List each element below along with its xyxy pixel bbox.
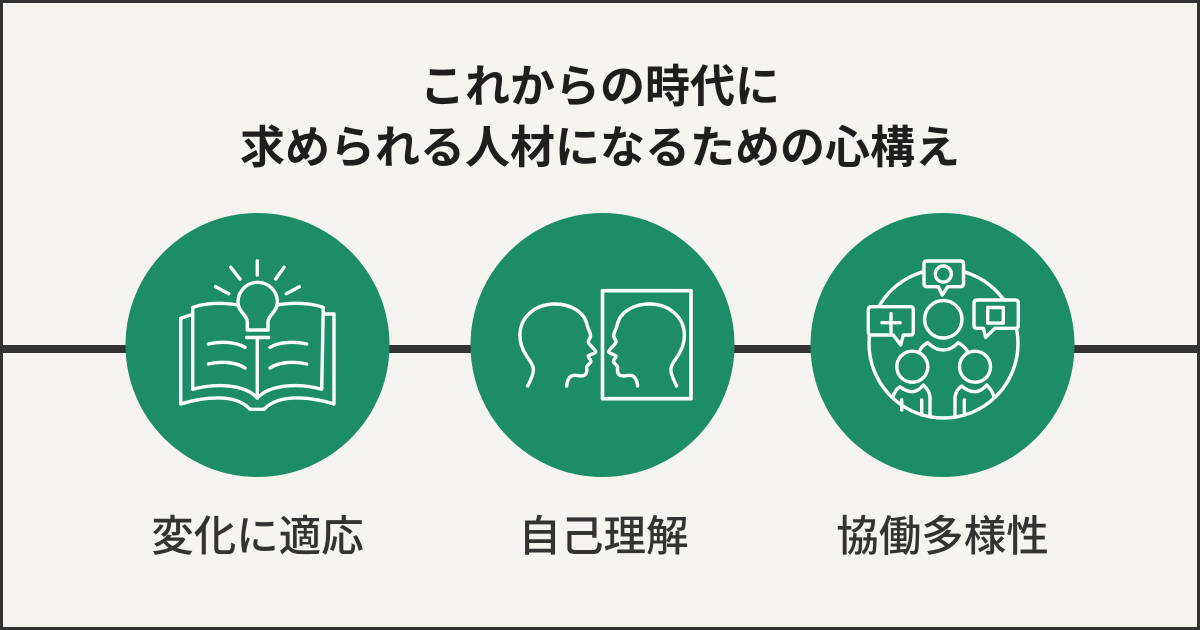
icon: book with light bulb	[126, 213, 390, 477]
label: self understanding: 自己理解	[518, 514, 688, 561]
icon: face and mirror	[470, 213, 734, 477]
icon: team with speech bubbles	[810, 213, 1074, 477]
title	[240, 61, 960, 173]
label: adapting to change: 変化に適応	[151, 514, 364, 561]
title: これからの時代に	[420, 61, 780, 112]
title: 求められる人材になるための心構え	[240, 122, 960, 173]
label: collaboration: 協働多様性	[836, 514, 1049, 561]
